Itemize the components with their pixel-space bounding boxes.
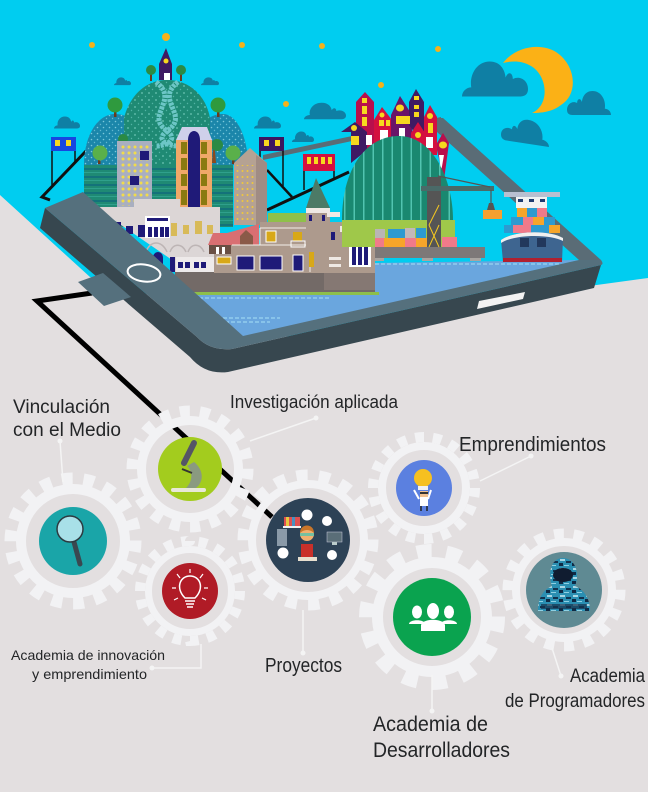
city: white palace xyxy=(95,199,220,272)
city: hills and domes xyxy=(84,80,248,227)
tablet: home button ring xyxy=(126,262,162,284)
tablet: white slot xyxy=(477,292,525,309)
icon: programmer xyxy=(266,498,350,582)
gear: Academia de innovación xyxy=(140,541,240,641)
background: cyan sky xyxy=(0,0,648,340)
label: Academia de Desarrolladores xyxy=(373,713,510,762)
city: grey building xyxy=(117,141,152,207)
water xyxy=(190,260,579,337)
pier xyxy=(375,247,485,261)
city: castle tower with green spire xyxy=(306,178,375,290)
label: Emprendimientos: Emprendimientos xyxy=(459,434,606,456)
city: trees xyxy=(92,65,240,164)
leader line: Vinculación xyxy=(58,438,63,482)
tablet: dark side xyxy=(40,208,601,372)
black connector line from tablet to gears xyxy=(37,293,272,517)
icon: light bulb xyxy=(162,563,218,619)
gear: Investigación aplicada xyxy=(132,411,248,527)
icon: microscope xyxy=(158,437,222,501)
icon: hooded hacker xyxy=(526,552,602,628)
label: Vinculación con el Medio: Vinculación xyxy=(13,397,110,418)
leader line: Desarrolladores xyxy=(430,675,434,714)
gear: Emprendimientos xyxy=(373,437,475,539)
city: taupe tower xyxy=(234,148,267,225)
gear: Proyectos xyxy=(243,475,373,605)
icon: group of people xyxy=(393,578,471,656)
city: lawn xyxy=(268,213,313,222)
tablet: back frame xyxy=(263,117,601,260)
label: Proyectos: Proyectos xyxy=(265,655,342,677)
gear: Academia de Desarrolladores xyxy=(366,551,498,683)
label: Vinculación con el Medio xyxy=(13,397,121,441)
label: Academia de innovación y emprendimiento: y emprendimiento xyxy=(32,666,147,682)
city: brown manor with pink roof xyxy=(175,222,379,295)
ship xyxy=(501,192,563,262)
icon: person holding bulb xyxy=(396,460,452,516)
moon xyxy=(503,47,573,113)
gear: Vinculación con el Medio xyxy=(10,478,136,604)
tablet: connector tab xyxy=(78,273,131,306)
leader line: Programadores xyxy=(552,648,564,678)
city: large green dome xyxy=(342,136,455,247)
label: Academia de innovación y emprendimiento xyxy=(11,647,165,682)
billboards and black rails xyxy=(42,137,349,210)
stars xyxy=(89,33,441,107)
label: Academia de innovación y emprendimiento: Academia de innovación xyxy=(11,647,165,663)
gear: Academia de Programadores xyxy=(508,534,620,646)
label: Vinculación con el Medio: con el Medio xyxy=(13,420,121,441)
leader line: Innovación xyxy=(150,644,201,670)
label: Academia de Desarrolladores: Academia de xyxy=(373,713,488,736)
city: colourful houses xyxy=(341,89,449,180)
label: Academia de Desarrolladores: Desarrolladores xyxy=(373,739,510,762)
icon: magnifier xyxy=(39,507,107,575)
crane xyxy=(421,176,502,247)
tablet: front bezel xyxy=(45,192,602,349)
leader line: Investigación xyxy=(250,416,318,441)
label: Investigación aplicada: Investigación aplicada xyxy=(230,392,399,412)
leader line: Proyectos xyxy=(300,610,306,656)
city: hilltop church xyxy=(159,48,172,80)
dock containers xyxy=(375,228,457,247)
city: orange tower xyxy=(176,127,212,207)
clouds xyxy=(54,62,611,147)
leader line: Emprendimientos xyxy=(480,454,534,481)
label: Academia de Programadores xyxy=(505,666,645,712)
